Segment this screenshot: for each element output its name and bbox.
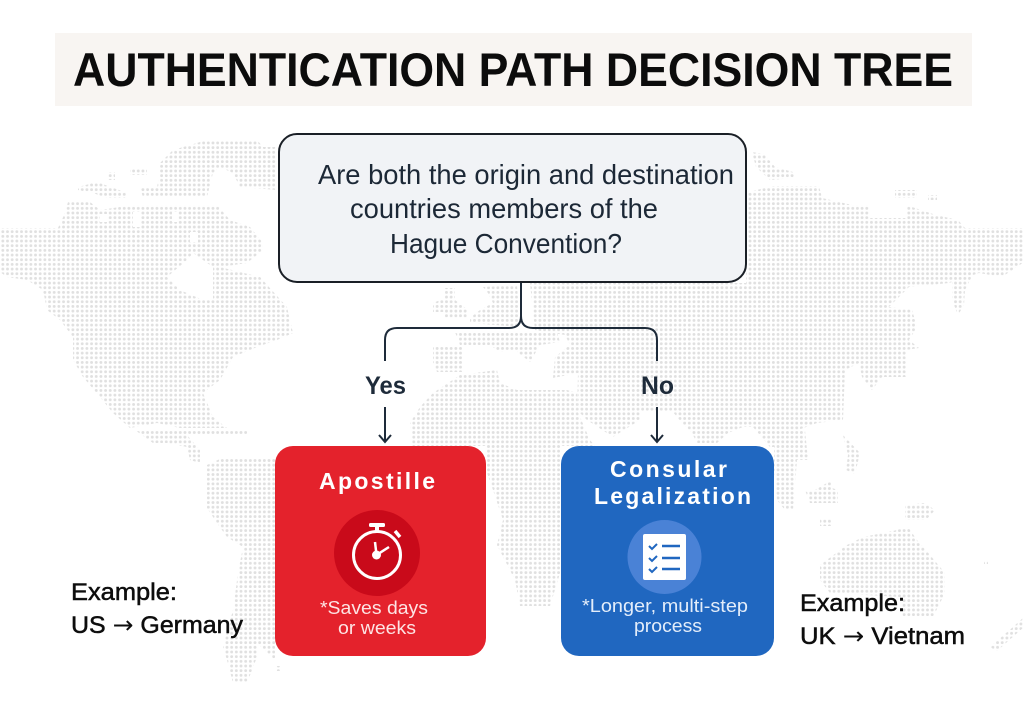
panel: Consular Legalization <box>561 446 774 656</box>
panel: Consular Legalization: Consular <box>610 456 727 482</box>
label: No with arrow: No <box>641 372 674 400</box>
example: UK to Vietnam: UK → Vietnam <box>800 622 965 650</box>
example: UK to Vietnam <box>800 590 965 650</box>
panel: Apostille: Apostille <box>319 468 435 494</box>
title: AUTHENTICATION PATH DECISION TREE <box>73 44 953 97</box>
question box: Are both the origin and destination <box>318 159 734 190</box>
example: US to Germany: US → Germany <box>71 611 243 639</box>
example: US to Germany: Example: <box>71 579 177 606</box>
label: No with arrow <box>641 372 674 442</box>
panel: Apostille <box>275 446 486 656</box>
icon: stopwatch <box>334 510 420 596</box>
panel: Apostille: or weeks <box>338 617 416 638</box>
panel: Consular Legalization: process <box>634 615 702 636</box>
panel: Consular Legalization: *Longer, multi-step <box>582 595 748 616</box>
icon: checklist <box>628 520 702 594</box>
example: US to Germany <box>71 579 243 639</box>
connector lines with Yes and No branches <box>385 282 657 361</box>
background: dotted world map <box>0 130 1024 690</box>
title <box>55 33 972 106</box>
panel: Consular Legalization: Legalization <box>594 483 751 509</box>
question box <box>279 134 746 282</box>
example: UK to Vietnam: Example: <box>800 590 905 617</box>
question box: Hague Convention? <box>390 228 622 259</box>
label: Yes with arrow: Yes <box>365 372 406 400</box>
panel: Apostille: *Saves days <box>320 597 428 618</box>
label: Yes with arrow <box>365 372 406 442</box>
question box: countries members of the <box>350 193 658 224</box>
